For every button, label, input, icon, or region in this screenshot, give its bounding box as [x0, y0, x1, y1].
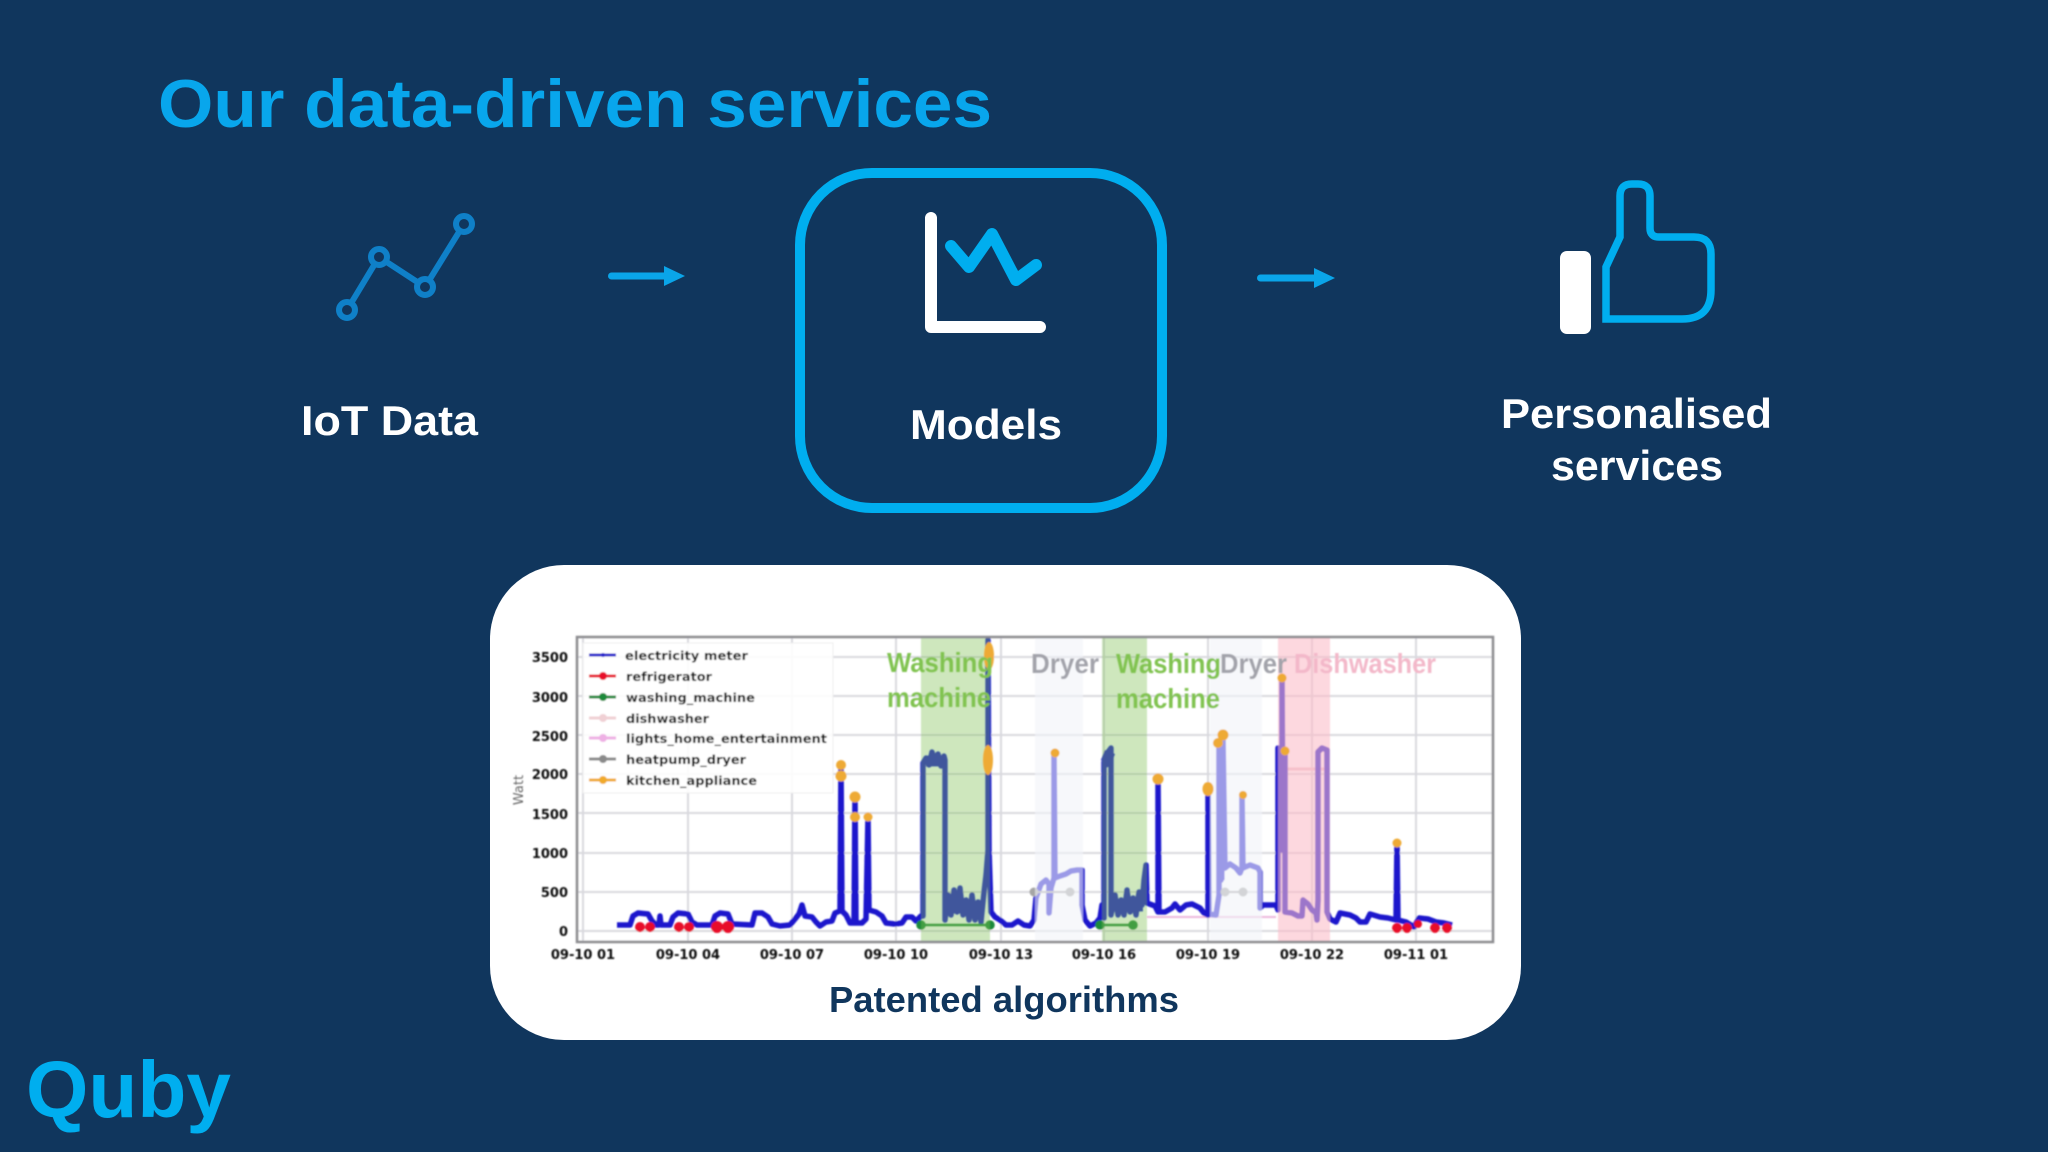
- x axis labels: 09-10 07: [760, 948, 824, 963]
- white card: [490, 565, 1521, 1040]
- x axis labels: 09-10 22: [1280, 948, 1344, 963]
- annotation: dishwasher: Dishwasher: [1294, 648, 1436, 679]
- series: refrigerator: [635, 920, 1452, 933]
- label: Models: Models: [910, 401, 1062, 448]
- panel: models: [800, 173, 1162, 508]
- legend entries: lights_home_entertainment: [626, 731, 827, 747]
- y axis labels: 3000: [532, 691, 568, 706]
- y axis labels: 500: [541, 886, 568, 901]
- series: kitchen appliance: [836, 642, 1402, 848]
- y axis title: Watt: [512, 775, 527, 805]
- plot grid: [577, 637, 1493, 942]
- series: heatpump dryer: [1030, 888, 1246, 896]
- annotation: washing machine 1: [887, 647, 993, 713]
- x axis labels: 09-11 01: [1384, 948, 1448, 963]
- label: Personalised services: [1501, 390, 1772, 489]
- title: Our data-driven services: [158, 66, 992, 142]
- legend entries: heatpump_dryer: [626, 752, 747, 768]
- highlight bands: dryer, washing machine, dishwasher: [921, 638, 1330, 941]
- annotation: washing machine 2: Washing: [1116, 648, 1221, 679]
- label: IoT Data: IoT Data: [301, 397, 479, 444]
- legend entries: kitchen_appliance: [626, 773, 757, 789]
- annotation: dryer 2: Dryer: [1220, 648, 1287, 679]
- plot frame: [577, 637, 1493, 942]
- legend entries: washing_machine: [626, 690, 755, 706]
- label: Personalised services: Personalised: [1501, 390, 1772, 437]
- annotation: washing machine 1: machine: [887, 682, 991, 713]
- y axis labels: 3500: [532, 651, 568, 666]
- logo: Quby: Quby: [26, 1045, 232, 1134]
- y axis labels: 1500: [532, 808, 568, 823]
- chart: appliance power disaggregation: [512, 637, 1493, 963]
- y axis labels: 1000: [532, 847, 568, 862]
- annotation: washing machine 2: machine: [1116, 683, 1220, 714]
- highlight box: [800, 173, 1162, 508]
- y axis labels: 0: [559, 925, 568, 940]
- x axis labels: [551, 948, 1448, 963]
- x axis labels: 09-10 16: [1072, 948, 1136, 963]
- legend entries: [589, 648, 827, 789]
- icon: thumbs up: [1560, 184, 1711, 334]
- x axis labels: 09-10 13: [969, 948, 1033, 963]
- x axis labels: 09-10 04: [656, 948, 720, 963]
- x axis labels: 09-10 10: [864, 948, 928, 963]
- series: washing machine: [918, 922, 1136, 928]
- legend entries: refrigerator: [626, 669, 713, 684]
- arrow: IoT data to models: [608, 266, 685, 286]
- label: Personalised services: services: [1551, 442, 1723, 489]
- annotation: dryer 1: Dryer: [1031, 648, 1099, 679]
- y axis labels: 2000: [532, 768, 568, 783]
- legend entries: electricity meter: [625, 648, 749, 663]
- icon: line chart with nodes: [339, 216, 472, 318]
- y axis labels: [532, 651, 568, 940]
- panel: IoT data: [301, 216, 479, 444]
- caption: Patented algorithms: [829, 979, 1179, 1020]
- legend box: [583, 643, 833, 793]
- annotation: washing machine 1: Washing: [887, 647, 993, 678]
- icon: chart axes with zigzag: [931, 218, 1040, 327]
- y axis labels: 2500: [532, 730, 568, 745]
- series: electricity meter: [617, 640, 1452, 927]
- panel: personalised services: [1501, 184, 1772, 489]
- arrow: models to services: [1257, 268, 1335, 288]
- x axis labels: 09-10 01: [551, 948, 615, 963]
- panel: patented algorithms: [490, 565, 1521, 1040]
- legend entries: dishwasher: [626, 711, 710, 726]
- series: pink appliance baselines: [1147, 769, 1330, 917]
- x axis labels: 09-10 19: [1176, 948, 1240, 963]
- annotation: washing machine 2: [1116, 648, 1221, 714]
